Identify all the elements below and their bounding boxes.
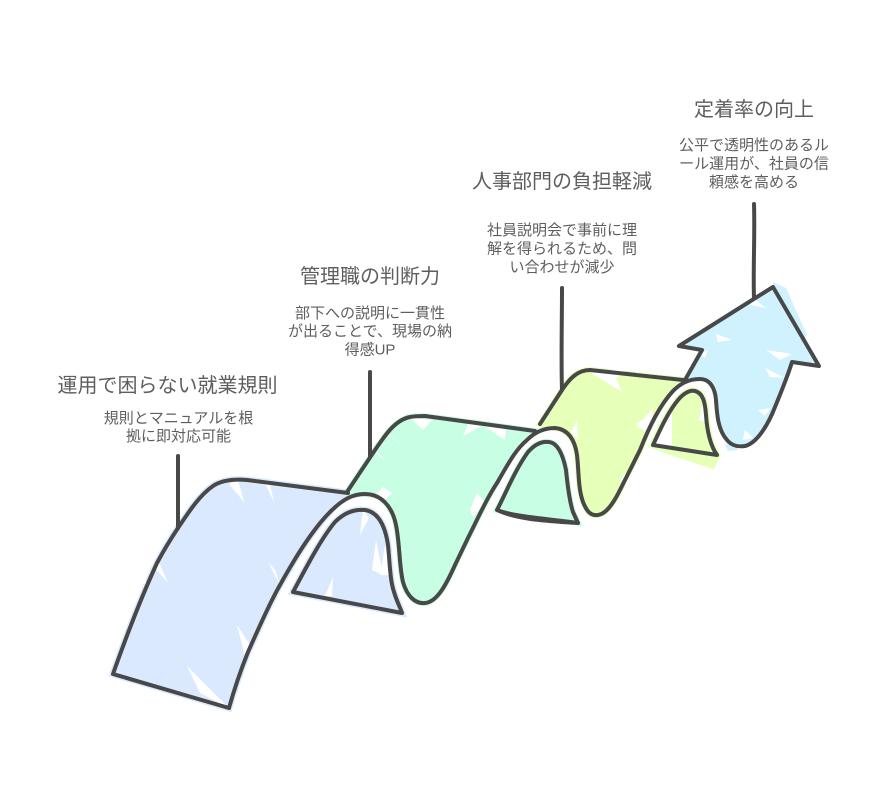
step 2: green ribbon: [347, 372, 578, 603]
label: step 1 heading: 運用で困らない就業規則: [58, 374, 278, 397]
label: step 1 body: 規則とマニュアルを根: [104, 410, 253, 427]
step 1 leader line: [176, 456, 180, 528]
label: step 4 body: ール運用が、社員の信: [679, 156, 829, 172]
label: step 2 body: 得感UP: [345, 342, 395, 358]
ribbon outlines: [113, 287, 819, 708]
label: step 1 body: 拠に即対応可能: [126, 428, 231, 445]
label: step 4 heading: 定着率の向上: [694, 98, 814, 121]
label: step 3 body: 解を得られるため、問: [487, 240, 637, 258]
step 1: blue ribbon: [113, 456, 402, 708]
step 4 leader line: [752, 204, 756, 298]
label: step 3 heading: 人事部門の負担軽減: [472, 170, 652, 193]
label: step 2 heading: 管理職の判断力: [300, 265, 440, 288]
label: step 3 body: 社員説明会で事前に理: [487, 222, 637, 239]
step 4: light-blue arrow: [679, 204, 819, 451]
label: step 4 body: 公平で透明性のあるル: [679, 137, 829, 154]
label: step 2 body: が出ることで、現場の納: [288, 323, 452, 340]
step 3 leader line: [560, 288, 564, 390]
step 3: yellow-green ribbon: [540, 288, 717, 515]
label: step 2 body: 部下への説明に一貫性: [295, 305, 445, 322]
step 2 leader line: [368, 372, 372, 456]
label: step 4 body: 頼感を高める: [709, 174, 799, 191]
label: step 3 body: い合わせが減少: [509, 259, 615, 276]
